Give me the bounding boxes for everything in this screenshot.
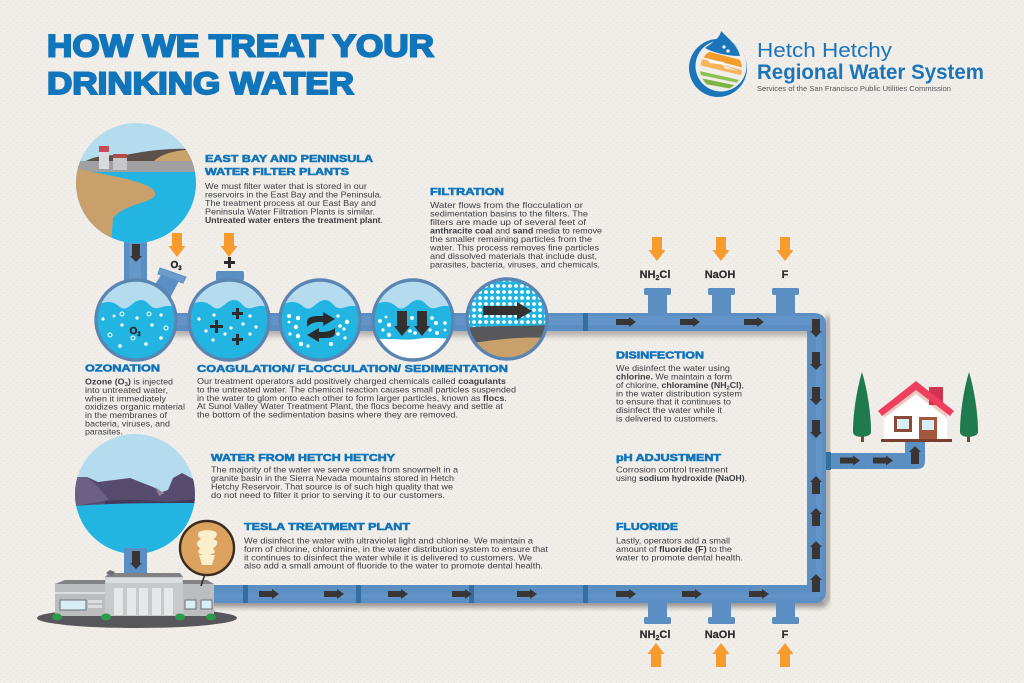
text: Ozonation: bacteria, viruses, and <box>85 418 170 428</box>
text: Coagulation, Flocculation, Sedimentation: in the water to glom onto each other to form larger particles, known as flocs. <box>197 393 507 403</box>
logo wordmark: Services of the San Francisco Public Utilities Commission <box>757 84 951 93</box>
text: Ozonation: ) <box>128 377 131 387</box>
illustration: Hetch Hetchy reservoir <box>73 434 197 556</box>
text: pH adjustment: Corrosion control treatment <box>616 464 729 474</box>
text: Water from Hetch Hetchy: do not need to filter it prior to serving it to our customers. <box>211 490 445 500</box>
text: Ozonation: is injected <box>133 377 170 387</box>
logo wordmark <box>757 40 984 93</box>
title <box>47 28 434 101</box>
text: East Bay and Peninsula: WATER FILTER PLANTS <box>205 167 349 178</box>
process circle: ozonation: 3 <box>137 332 141 338</box>
chemical labels and arrows: bottom: NaOH <box>705 629 735 641</box>
icon: UV light bulb callout <box>180 521 234 586</box>
text: East Bay and Peninsula: Peninsula Water Filtration Plants is similar. <box>205 206 375 216</box>
chemical labels and arrows: top: Cl <box>659 269 670 281</box>
text: East Bay and Peninsula <box>205 154 383 225</box>
text: Tesla Treatment Plant: TESLA TREATMENT PLANT <box>244 522 411 533</box>
text: Filtration: Water flows from the flocculation or <box>430 200 583 210</box>
text: Disinfection: Cl) <box>730 380 742 390</box>
illustration: Tesla treatment plant building <box>37 570 237 628</box>
icon: logo drop <box>689 31 748 97</box>
text: Water from Hetch Hetchy: granite basin in the Sierra Nevada mountains stored in Hetch <box>211 473 454 483</box>
process circle: filtration <box>465 277 549 361</box>
chemical labels and arrows: bottom <box>640 629 794 667</box>
text: Ozonation: OZONATION <box>85 364 160 374</box>
chemical labels and arrows: bottom: Cl <box>659 629 670 641</box>
house service pipe <box>826 438 925 470</box>
text: Water from Hetch Hetchy <box>211 453 458 500</box>
text: Coagulation, Flocculation, Sedimentation: to the untreated water. The chemical reaction causes small particles suspended <box>197 384 516 394</box>
text: Ozonation: in the membranes of <box>85 410 168 420</box>
text: Tesla Treatment Plant <box>244 522 549 571</box>
chemical labels and arrows: bottom: 2 <box>655 635 659 642</box>
text: pH adjustment: pH ADJUSTMENT <box>616 453 722 464</box>
text: Disinfection: in the water distribution system <box>616 388 742 398</box>
title: HOW WE TREAT YOUR <box>47 28 434 64</box>
text: Disinfection: , <box>742 380 744 390</box>
text: Water from Hetch Hetchy: Hetchy Reservoir. That source is of such high quality that we <box>211 482 453 492</box>
illustration: East Bay reservoir <box>74 123 198 245</box>
text: Filtration: FILTRATION <box>430 187 504 198</box>
text: pH adjustment: using sodium hydroxide (NaOH) . <box>616 473 747 483</box>
text: Filtration: parasites, bacteria, viruses, and chemicals. <box>430 260 600 270</box>
illustration: house <box>878 381 954 442</box>
coagulant inlet fitting <box>216 271 244 288</box>
process circle: sedimentation <box>371 279 455 362</box>
text: Filtration: and dissolved materials that include dust, <box>430 251 597 261</box>
chemical labels and arrows: top: F <box>782 269 789 281</box>
inlet pipe: reservoir to ozonation <box>124 235 147 285</box>
text: Fluoride: FLUORIDE <box>616 522 678 533</box>
text: Ozonation: parasites. <box>85 427 123 437</box>
text: Filtration: sedimentation basins to the filters. The <box>430 208 588 218</box>
pipe fittings: bottom <box>644 602 799 624</box>
text: Ozonation: when it immediately <box>84 393 167 403</box>
ozone and coagulant input arrows: 3 <box>178 266 182 272</box>
text: Ozonation <box>84 364 185 437</box>
process circle: flocculation <box>278 279 362 362</box>
text: Tesla Treatment Plant: also add a small amount of fluoride to the water to promote dental health. <box>244 561 543 571</box>
text: Tesla Treatment Plant: it continues to disinfect the water while it is delivered to customers. We <box>244 552 532 562</box>
text: Filtration: water. This process removes fine particles <box>429 242 599 252</box>
flow arrows: right pipe <box>810 319 822 592</box>
chemical labels and arrows: top: 2 <box>655 275 659 282</box>
text: Disinfection: We disinfect the water using <box>616 363 730 373</box>
logo wordmark: Hetch Hetchy <box>757 40 892 62</box>
text: Water from Hetch Hetchy: WATER FROM HETCH HETCHY <box>211 453 395 464</box>
text: Ozonation: into untreated water, <box>85 385 168 395</box>
text: Coagulation, Flocculation, Sedimentation: At Sunol Valley Water Treatment Plant, the flocs become heavy and settle at <box>197 401 504 411</box>
text: Coagulation, Flocculation, Sedimentation: the bottom of the sedimentation basins where they are removed. <box>197 410 458 420</box>
text: Filtration <box>429 187 602 270</box>
chemical labels and arrows: bottom: F <box>782 629 789 641</box>
text: East Bay and Peninsula: Untreated water enters the treatment plant . <box>205 215 383 225</box>
text: East Bay and Peninsula: We must filter water that is stored in our <box>205 181 367 191</box>
inlet pipe: Hetch Hetchy to Tesla <box>124 548 147 578</box>
text: East Bay and Peninsula: The treatment process at our East Bay and <box>205 198 376 208</box>
illustration: right tree <box>960 372 978 442</box>
text: Fluoride: water to promote dental health. <box>615 552 743 562</box>
text: Disinfection: chlorine. We maintain a form <box>616 372 732 382</box>
text: Disinfection: DISINFECTION <box>616 350 704 362</box>
text: Coagulation, Flocculation, Sedimentation: Our treatment operators add positively charged chemicals called coagulants <box>197 376 506 386</box>
text: Disinfection <box>616 350 744 424</box>
text: Filtration: anthracite coal and sand media to remove <box>430 226 602 236</box>
pipe fittings: top <box>644 288 799 314</box>
text: Water from Hetch Hetchy: The majority of the water we serve comes from snowmelt in a <box>211 464 458 474</box>
text: Tesla Treatment Plant: We disinfect the water with ultraviolet light and chlorine. We maintain a <box>244 536 533 546</box>
title: DRINKING WATER <box>47 65 354 101</box>
text: Disinfection: 2 <box>727 386 730 392</box>
text: Coagulation, Flocculation, Sedimentation <box>197 364 516 420</box>
text: Ozonation: oxidizes organic material <box>85 402 185 412</box>
ozone and coagulant input arrows <box>168 233 238 272</box>
chemical labels and arrows: bottom: NH <box>640 629 655 641</box>
text: Fluoride <box>615 522 743 562</box>
chemical labels and arrows: top: NaOH <box>705 269 735 281</box>
text: pH adjustment <box>616 453 747 483</box>
text: Fluoride: Lastly, operators add a small <box>616 536 730 546</box>
text: Filtration: filters are made up of several feet of <box>430 217 587 227</box>
text: Filtration: the smaller remaining particles from the <box>430 234 592 244</box>
ozone and coagulant input arrows: O <box>170 260 178 271</box>
chemical labels and arrows: top <box>640 237 794 282</box>
text: Disinfection: to ensure that it continues to <box>616 397 731 407</box>
process circle: ozonation: O <box>129 326 137 337</box>
text: Fluoride: amount of fluoride (F) to the <box>616 544 732 554</box>
ozone inlet fitting <box>150 268 186 302</box>
text: Ozonation: Ozone (O <box>85 377 131 388</box>
process circle: ozonation <box>94 279 178 362</box>
flow arrows: bottom pipe <box>259 589 769 599</box>
pipe: main water pipeline <box>170 313 830 607</box>
text: Ozonation: 3 <box>125 382 128 388</box>
text: Disinfection: of chlorine, chloramine (NH <box>616 380 723 390</box>
text: East Bay and Peninsula: EAST BAY AND PENINSULA <box>205 154 374 165</box>
flow arrows: top pipe <box>616 317 764 327</box>
text: Disinfection: is delivered to customers. <box>616 414 718 424</box>
process circle: coagulation <box>187 279 271 362</box>
illustration: left tree <box>853 372 871 442</box>
text: Coagulation, Flocculation, Sedimentation: COAGULATION/ FLOCCULATION/ SEDIMENTATION <box>197 364 508 375</box>
logo wordmark: Regional Water System <box>757 61 984 84</box>
logo: Hetch Hetchy Regional Water System <box>689 31 984 97</box>
chemical labels and arrows: top: NH <box>640 269 655 281</box>
text: East Bay and Peninsula: reservoirs in the East Bay and the Peninsula. <box>205 190 382 200</box>
text: Tesla Treatment Plant: form of chlorine, chloramine, in the water distribution system to ensure that <box>244 544 549 554</box>
text: Disinfection: disinfect the water while it <box>616 405 723 415</box>
